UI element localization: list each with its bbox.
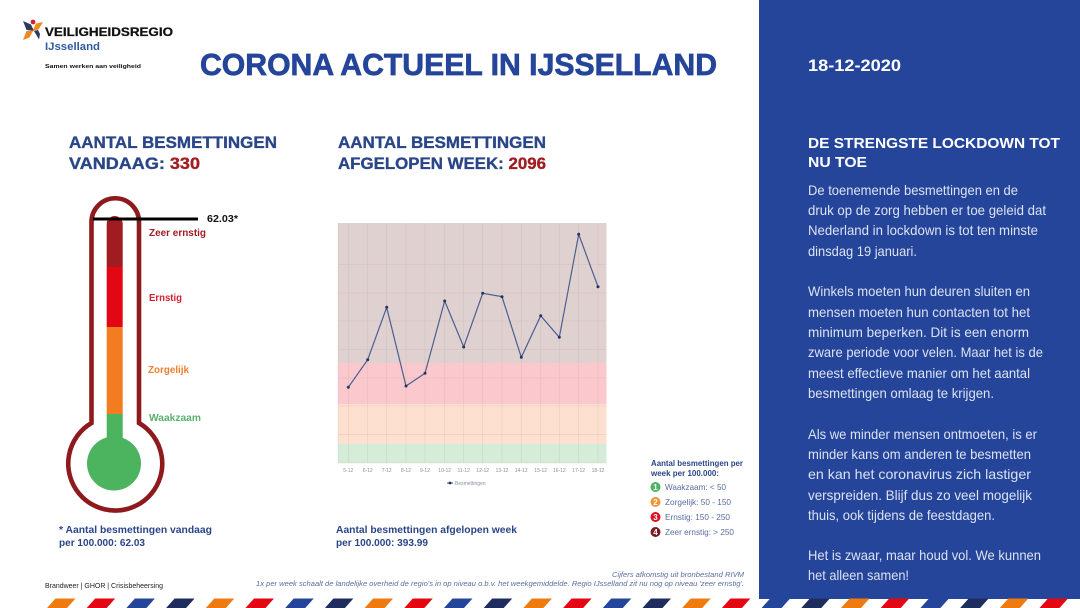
sidebar body text: verspreiden. Blijf dus zo veel mogelijk — [808, 487, 1033, 503]
x axis labels: 12-12 — [476, 468, 489, 474]
level: severe — [107, 267, 123, 327]
note: today's rate: per 100.000: 62.03 — [59, 538, 145, 549]
sidebar body text: druk op de zorg hebben er toe geleid dat — [808, 202, 1046, 218]
legend heading: week per 100.000: — [650, 469, 719, 478]
label: vigilant: Waakzaam — [149, 413, 201, 424]
band: concerning — [338, 404, 606, 444]
line chart — [338, 223, 606, 487]
sidebar body text: het alleen samen! — [808, 567, 909, 583]
sidebar body text: minder kans om anderen te besmetten — [808, 446, 1031, 462]
heading: last week's infections — [338, 133, 546, 173]
label: very severe: Zeer ernstig — [149, 228, 206, 239]
x axis labels: 6-12 — [363, 468, 373, 474]
data points — [347, 233, 600, 389]
note: weekly rate: per 100.000: 393.99 — [336, 538, 428, 549]
x axis labels: 17-12 — [572, 468, 585, 474]
date: 18-12-2020 — [808, 57, 901, 75]
x axis labels: 15-12 — [534, 468, 547, 474]
sidebar body text: meest effectieve manier om het aantal — [808, 365, 1030, 381]
heading: last week's infections: AFGELOPEN WEEK: 2096 — [338, 154, 546, 173]
x axis labels: 18-12 — [592, 468, 605, 474]
legend item: very severe: Zeer ernstig: > 250 — [665, 527, 734, 537]
sidebar heading: NU TOE — [808, 154, 867, 171]
title: CORONA ACTUEEL IN IJSSELLAND — [200, 47, 717, 82]
legend heading: Aantal besmettingen per — [651, 459, 743, 468]
label: concerning: Zorgelijk — [148, 365, 189, 376]
heading: today's infections: VANDAAG: 330 — [69, 154, 200, 173]
x axis labels: 16-12 — [553, 468, 566, 474]
logo tagline: Samen werken aan veiligheid — [45, 64, 142, 70]
icon: logo mark — [23, 20, 43, 40]
thermometer bulb — [87, 436, 141, 490]
legend heading — [650, 459, 743, 478]
sidebar heading — [808, 135, 1060, 171]
chart legend: Besmettingen — [455, 481, 486, 487]
level: vigilant — [107, 414, 123, 444]
sidebar body text: Winkels moeten hun deuren sluiten en — [808, 283, 1030, 299]
source note: 1x per week schaalt de landelijke overheid de regio's in op niveau o.b.v. het weekgemiddelde. Regio IJsselland zit nu nog op niveau 'zeer ernstig'. — [256, 579, 744, 588]
legend item: concerning: 2 — [653, 498, 658, 507]
thermometer — [68, 198, 238, 511]
band: very severe — [338, 223, 606, 363]
thermometer outline — [68, 198, 162, 511]
airmail stripe border — [47, 598, 1068, 608]
heading: today's infections: AANTAL BESMETTINGEN — [69, 133, 277, 152]
heading: last week's infections: AANTAL BESMETTINGEN — [338, 133, 546, 152]
data line — [348, 234, 598, 387]
band: severe — [338, 363, 606, 404]
sidebar heading: DE STRENGSTE LOCKDOWN TOT — [808, 135, 1060, 152]
sidebar body text: dinsdag 19 januari. — [808, 243, 917, 259]
note: weekly rate — [336, 525, 517, 549]
level: very severe — [107, 216, 123, 267]
sidebar body text: De toenemende besmettingen en de — [808, 182, 1018, 198]
x axis labels: 13-12 — [496, 468, 509, 474]
logo wordmark: VEILIGHEIDSREGIO — [45, 27, 173, 39]
note: today's rate: * Aantal besmettingen vandaag — [59, 525, 212, 536]
source note — [256, 570, 745, 588]
legend item: very severe: 4 — [653, 528, 658, 537]
band: vigilant — [338, 444, 606, 463]
sidebar body text: en kan het coronavirus zich lastiger — [808, 466, 1031, 482]
x axis labels — [343, 468, 605, 474]
sidebar body text — [808, 182, 1046, 583]
note: today's rate — [59, 525, 212, 549]
x axis labels: 10-12 — [438, 468, 451, 474]
threshold legend — [650, 459, 743, 537]
legend item: severe: Ernstig: 150 - 250 — [665, 512, 730, 522]
logo — [23, 20, 173, 70]
source note: Cijfers afkomstig uit bronbestand RIVM — [612, 570, 745, 579]
x axis labels: 9-12 — [420, 468, 430, 474]
level: concerning — [107, 327, 123, 414]
x axis labels: 14-12 — [515, 468, 528, 474]
sidebar body text: minimum beperken. Dit is een enorm — [808, 324, 1029, 340]
sidebar body text: thuis, ook tijdens de feestdagen. — [808, 507, 995, 523]
footer organisations: Brandweer | GHOR | Crisisbeheersing — [45, 581, 163, 590]
legend item: concerning: Zorgelijk: 50 - 150 — [665, 497, 731, 507]
note: weekly rate: Aantal besmettingen afgelopen week — [336, 525, 517, 536]
x axis labels: 5-12 — [343, 468, 354, 474]
sidebar body text: Het is zwaar, maar houd vol. We kunnen — [808, 547, 1041, 563]
sidebar body text: Nederland in lockdown is tot ten minste — [808, 222, 1038, 238]
x axis labels: 11-12 — [457, 468, 470, 474]
marker value: 62.03* — [207, 214, 238, 225]
x axis labels: 8-12 — [401, 468, 411, 474]
sidebar body text: mensen moeten hun contacten tot het — [808, 304, 1030, 320]
sidebar body text: zware periode voor velen. Maar het is de — [808, 344, 1043, 360]
x axis labels: 7-12 — [382, 468, 392, 474]
legend item: severe: 3 — [653, 513, 658, 522]
legend item: vigilant: 1 — [653, 483, 658, 492]
sidebar body text: besmettingen omlaag te krijgen. — [808, 385, 994, 401]
current value marker — [93, 218, 198, 220]
sidebar body text: Als we minder mensen ontmoeten, is er — [808, 426, 1037, 442]
logo region name: IJsselland — [45, 41, 100, 53]
heading: today's infections — [69, 133, 277, 173]
label: severe: Ernstig — [149, 293, 182, 304]
legend item: vigilant: Waakzaam: < 50 — [665, 482, 726, 492]
panel: right sidebar — [759, 0, 1080, 599]
